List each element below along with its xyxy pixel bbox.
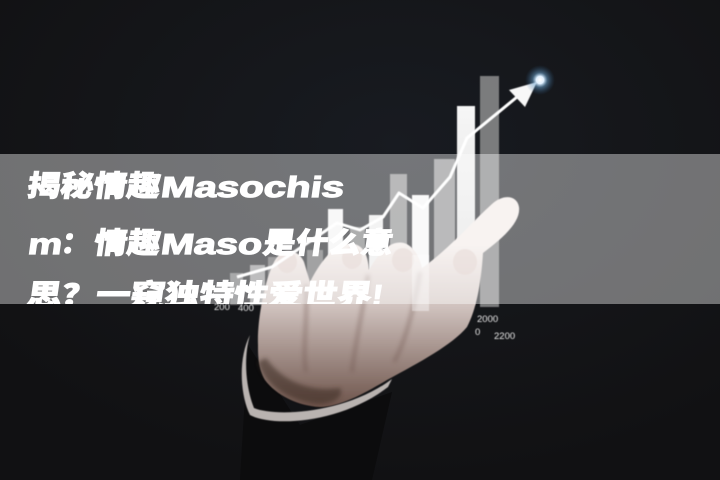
title (25, 170, 396, 312)
shirt cuff (242, 335, 392, 421)
icon: arrow tip glow (525, 65, 555, 95)
white bar reflection (412, 255, 429, 311)
title line 1: Masochis (159, 172, 346, 204)
translucent title band (0, 154, 720, 304)
title line 2: 情趣 (92, 227, 163, 260)
hand with suit cuff (240, 197, 519, 480)
finger creases (305, 272, 420, 372)
title line 2: 是什么意 (261, 226, 396, 260)
axis numbers (214, 302, 515, 342)
bar chart (230, 76, 499, 307)
axis numbers: 200 (214, 302, 230, 313)
title line 2: ： (59, 228, 92, 260)
title line 2: Maso (159, 229, 264, 261)
axis numbers: 0 (475, 327, 480, 338)
title line 2: m (26, 229, 64, 261)
title line 1 (27, 170, 344, 200)
axis numbers: 2200 (494, 331, 515, 342)
palm shadow (258, 358, 341, 404)
axis numbers: 2000 (477, 314, 498, 325)
fingernails (277, 247, 477, 275)
suit sleeve (240, 345, 392, 480)
title line 3: 思？一窥独特性爱世界! (25, 278, 386, 312)
title line 2 (28, 228, 394, 257)
trend line arrow (237, 82, 537, 277)
palm, fingers and thumb (258, 197, 519, 407)
axis numbers: 400 (238, 303, 254, 314)
title line 1: 揭秘情趣 (25, 170, 163, 203)
